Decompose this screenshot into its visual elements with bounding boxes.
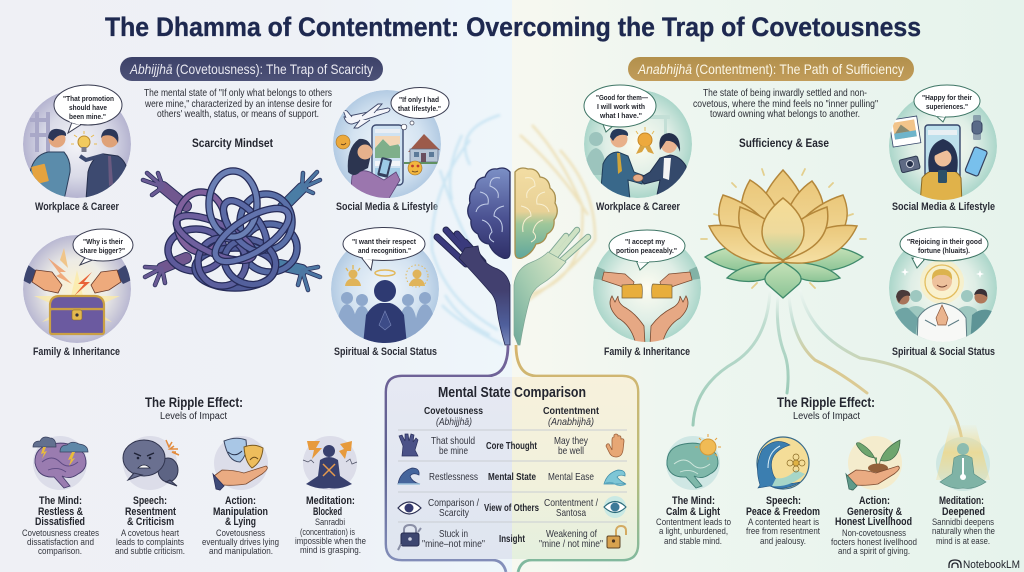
definition text: were mine," characterized by an intense desire for <box>144 98 332 110</box>
icon: masks over hand <box>213 436 268 490</box>
speech bubble <box>584 85 656 132</box>
label: Workplace & Career <box>596 201 681 213</box>
speech bubble: should have <box>69 103 107 112</box>
text: mind benefit: a light, unburdened, <box>659 526 728 536</box>
text: action impact: and manipulation. <box>209 546 273 556</box>
heading pill: Abhijjha: Abhijjhā (Covetousness): The Trap of Scarcity <box>129 61 373 77</box>
text: speech impact <box>115 495 185 556</box>
text: meditation benefit <box>932 495 995 546</box>
label: Social Media & Lifestyle <box>892 201 995 213</box>
text: mind benefit: The Mind: <box>672 495 715 507</box>
right brain hemisphere <box>515 168 557 258</box>
speech bubble: that lifestyle." <box>398 104 441 113</box>
text: meditation benefit: mind is at ease. <box>936 536 990 546</box>
subheading: Levels of Impact <box>160 411 227 422</box>
text: mind impact <box>22 495 99 556</box>
icon: radiant meditator <box>936 425 990 491</box>
text: speech benefit <box>746 495 820 546</box>
row: mental state: Mental Ease <box>548 471 594 483</box>
heading: The Ripple Effect: <box>145 395 243 410</box>
column head: contentment: Contentment <box>543 405 599 417</box>
vignette: workplace and career (contented) <box>584 85 692 213</box>
heading: scarcity mindset: Scarcity Mindset <box>192 136 273 150</box>
left hand and stem <box>437 230 510 345</box>
item: the mind <box>656 434 731 546</box>
row: core thought: That should <box>431 435 475 447</box>
vignette: social media and lifestyle (covetous) <box>333 88 449 213</box>
text: action impact <box>202 495 279 556</box>
text: meditation benefit: naturally when the <box>932 526 995 536</box>
panel: mental state comparison table <box>387 377 637 559</box>
panel: ripple effect (covetousness) <box>22 395 366 556</box>
row: insight: "mine–not mine" <box>422 538 485 550</box>
illustration: tangled knot with grasping hands <box>143 171 320 292</box>
table title: Mental State Comparison <box>438 384 586 401</box>
item: meditation <box>295 436 366 555</box>
label: Spiritual & Social Status <box>334 346 437 358</box>
text: speech benefit: A contented heart is <box>748 517 819 527</box>
panel: ripple effect (contentment) <box>656 395 995 556</box>
icon: dark eye <box>398 502 421 514</box>
speech bubble: I will work with <box>597 102 645 111</box>
text: action impact: Manipulation <box>213 506 268 518</box>
speech bubble <box>914 85 980 122</box>
speech bubble: superiences." <box>926 102 968 111</box>
right hand and stem <box>514 230 588 345</box>
speech bubble: "If only I had <box>399 95 439 104</box>
text: mind benefit <box>656 495 731 546</box>
text: speech benefit: Speech: <box>766 495 801 507</box>
definition text <box>144 87 332 120</box>
text: action impact: eventually drives lying <box>202 537 279 547</box>
vignette: spiritual and social status (covetous) <box>331 228 439 358</box>
text: action impact: Action: <box>225 495 256 507</box>
heading pill: Abhijjha <box>120 57 383 81</box>
column head: covetousness: (Abhijjhā) <box>436 416 472 428</box>
label: Workplace & Career <box>35 201 120 213</box>
row: insight: Stuck in <box>439 528 468 540</box>
icon: brain with sun <box>666 434 721 490</box>
item: action <box>202 436 279 556</box>
text: speech impact: Resentment <box>125 506 176 518</box>
icon: grasping hand <box>399 434 418 456</box>
text: action benefit: Non-covetousness <box>842 528 906 538</box>
frame connector lines to table <box>386 345 638 572</box>
icon: stormy wave <box>398 468 420 484</box>
definition text: The mental state of "If only what belongs to others <box>144 87 332 99</box>
definition text: others' wealth, status, or means of support. <box>157 108 319 120</box>
text: action benefit: focters honest livellhood <box>831 537 917 547</box>
illustration: central brain and hands <box>386 115 638 572</box>
text: action benefit: and a spirit of giving. <box>838 546 910 556</box>
row: core thought: be mine <box>439 445 468 457</box>
vignette: family and inheritance (contented) <box>590 230 704 358</box>
row: view of others: Santosa <box>556 507 586 519</box>
text: speech impact: & Criticism <box>127 516 174 528</box>
wisps around right hand <box>520 125 595 305</box>
heading pill: Anabhijha <box>628 57 914 81</box>
text: mind impact: Restless & <box>38 506 83 518</box>
vignette: spiritual and social status (contented) <box>889 227 997 358</box>
icon: angry speech bubbles <box>123 436 179 490</box>
speech bubble <box>900 227 988 268</box>
text: action benefit: Honest Livellhood <box>835 516 912 528</box>
icon: calm eye <box>604 496 626 518</box>
text: mind impact: dissatisfaction and <box>27 537 94 547</box>
heading: The Ripple Effect: <box>777 395 875 410</box>
title: The Dhamma of Contentment: Overcoming the Trap of Covetousness <box>105 12 921 42</box>
text: meditation impact: Meditation: <box>306 495 355 507</box>
vignette: workplace and career (covetous) <box>23 85 131 213</box>
speech bubble: fortune (hluaits). <box>918 246 970 255</box>
text: action benefit: Generosity & <box>847 506 902 518</box>
row: view of others: Comparison / <box>428 497 479 509</box>
text: mind impact: Covetousness creates <box>22 528 99 538</box>
row: mental state: Mental State <box>488 471 536 483</box>
item: action <box>831 436 917 556</box>
text: mind impact: Dissatisfied <box>35 516 85 528</box>
item: speech <box>115 436 185 556</box>
table background <box>387 377 637 559</box>
icon: wave bubble with flower <box>757 437 809 489</box>
column head: covetousness <box>424 405 483 428</box>
text: mind benefit: Contentment leads to <box>656 517 731 527</box>
row: insight: "mine / not mine" <box>539 538 603 550</box>
row: insight: Insight <box>499 533 525 545</box>
text: speech impact: Speech: <box>133 495 167 507</box>
text: meditation impact: mind is grasping. <box>300 545 361 555</box>
text: action impact: & Lying <box>225 516 256 528</box>
definition text: The state of being inwardly settled and non- <box>703 87 867 99</box>
speech bubble: "Happy for their <box>922 93 972 102</box>
left brain hemisphere <box>468 168 510 258</box>
icon: open padlock <box>607 526 626 548</box>
text: action benefit <box>831 495 917 556</box>
icon: open hand <box>606 434 624 457</box>
wisps around left hand <box>432 115 505 345</box>
text: action impact: Covetousness <box>216 528 265 538</box>
row: insight <box>398 525 626 550</box>
row: mental state: Restlessness <box>429 471 478 483</box>
item: meditation <box>932 425 995 546</box>
column head: covetousness: Covetousness <box>424 405 483 417</box>
speech bubble <box>73 229 133 265</box>
vignette: family and inheritance (covetous) <box>18 229 136 358</box>
subheading: Levels of Impact <box>793 411 860 422</box>
text: speech benefit: and jealousy. <box>760 536 806 546</box>
row: insight: Weakening of <box>546 528 597 540</box>
row: core thought: Core Thought <box>486 440 537 452</box>
text: action benefit: Action: <box>859 495 890 507</box>
text: mind impact: The Mind: <box>39 495 82 507</box>
icon: blocked meditator <box>303 436 357 490</box>
panel: covetousness side <box>18 57 449 358</box>
text: meditation impact <box>295 495 366 555</box>
heading pill: Anabhijha: Anabhijhā (Contentment): The Path of Sufficiency <box>637 61 904 77</box>
text: speech impact: leads to complaints <box>116 537 184 547</box>
text: mind impact: comparison. <box>38 546 82 556</box>
item: speech <box>746 437 820 546</box>
item: the mind <box>22 436 99 556</box>
icon: closed padlock with chain <box>398 525 421 550</box>
row: core thought <box>399 434 624 457</box>
text: meditation impact: (concentration) is <box>300 527 355 537</box>
icon: stormy brain <box>33 436 88 490</box>
definition text <box>693 87 878 120</box>
speech bubble: "Rejoicing in their good <box>907 237 982 246</box>
text: meditation benefit: Deepened <box>942 506 985 518</box>
text: speech impact: and subtle criticism. <box>115 546 185 556</box>
heading: sufficiency and ease: Sufficiency & Ease <box>739 136 829 150</box>
row: view of others: Scarcity <box>439 507 470 519</box>
text: mind benefit: Calm & Light <box>666 506 720 518</box>
speech bubble: "That promotion <box>63 94 114 103</box>
speech bubble <box>343 228 425 270</box>
speech bubble: "I want their respect <box>352 237 416 246</box>
text: mind benefit: and stable mind. <box>664 536 722 546</box>
row: core thought: May they <box>554 435 589 447</box>
panel: contentment side <box>584 57 997 440</box>
speech bubble: "I accept my <box>625 237 666 246</box>
label: Family & Inheritance <box>604 346 690 358</box>
definition text: covetous, where the mind feels no "inner pulling" <box>693 98 878 110</box>
speech bubble <box>609 230 685 270</box>
logo: NotebookLM: NotebookLM <box>963 559 1020 571</box>
speech bubble: portion peaceably." <box>616 246 677 255</box>
row: view of others <box>398 496 626 519</box>
text: speech benefit: Peace & Freedom <box>746 506 820 518</box>
icon: calm wave <box>604 470 626 486</box>
row: view of others: View of Others <box>484 502 539 514</box>
speech bubble: what I have." <box>599 111 642 120</box>
text: meditation benefit: Meditation: <box>939 495 984 507</box>
text: meditation impact: Sanradbi <box>315 517 345 527</box>
row: mental state <box>398 468 626 486</box>
speech bubble: been mine." <box>69 112 106 121</box>
speech bubble: share bigger?" <box>80 246 125 255</box>
text: speech impact: A covetous heart <box>121 528 179 538</box>
icon: hand with sprout <box>846 436 902 490</box>
speech bubble: "Good for them— <box>596 93 648 102</box>
label: Family & Inheritance <box>33 346 120 358</box>
column head: contentment <box>543 405 599 428</box>
text: meditation impact: Blocked <box>313 506 342 518</box>
definition text: toward owning what belongs to another. <box>710 108 860 120</box>
speech bubble <box>54 85 122 133</box>
row: core thought: be well <box>558 445 584 457</box>
text: meditation impact: impossible when the <box>295 536 366 546</box>
row: view of others: Contentment / <box>544 497 598 509</box>
speech bubble <box>391 88 449 130</box>
label: Social Media & Lifestyle <box>336 201 438 213</box>
text: meditation benefit: Sannidbi deepens <box>932 517 994 527</box>
column head: contentment: (Anabhijhā) <box>548 416 594 428</box>
illustration: flowing roots from lotus to ripple effects <box>693 290 962 440</box>
text: speech benefit: free from resentment <box>746 526 820 536</box>
speech bubble: "Why is their <box>83 237 123 246</box>
speech bubble: and recognition." <box>358 246 411 255</box>
label: Spiritual & Social Status <box>892 346 995 358</box>
vignette: social media and lifestyle (contented) <box>889 85 997 213</box>
illustration: golden lotus <box>701 169 866 298</box>
